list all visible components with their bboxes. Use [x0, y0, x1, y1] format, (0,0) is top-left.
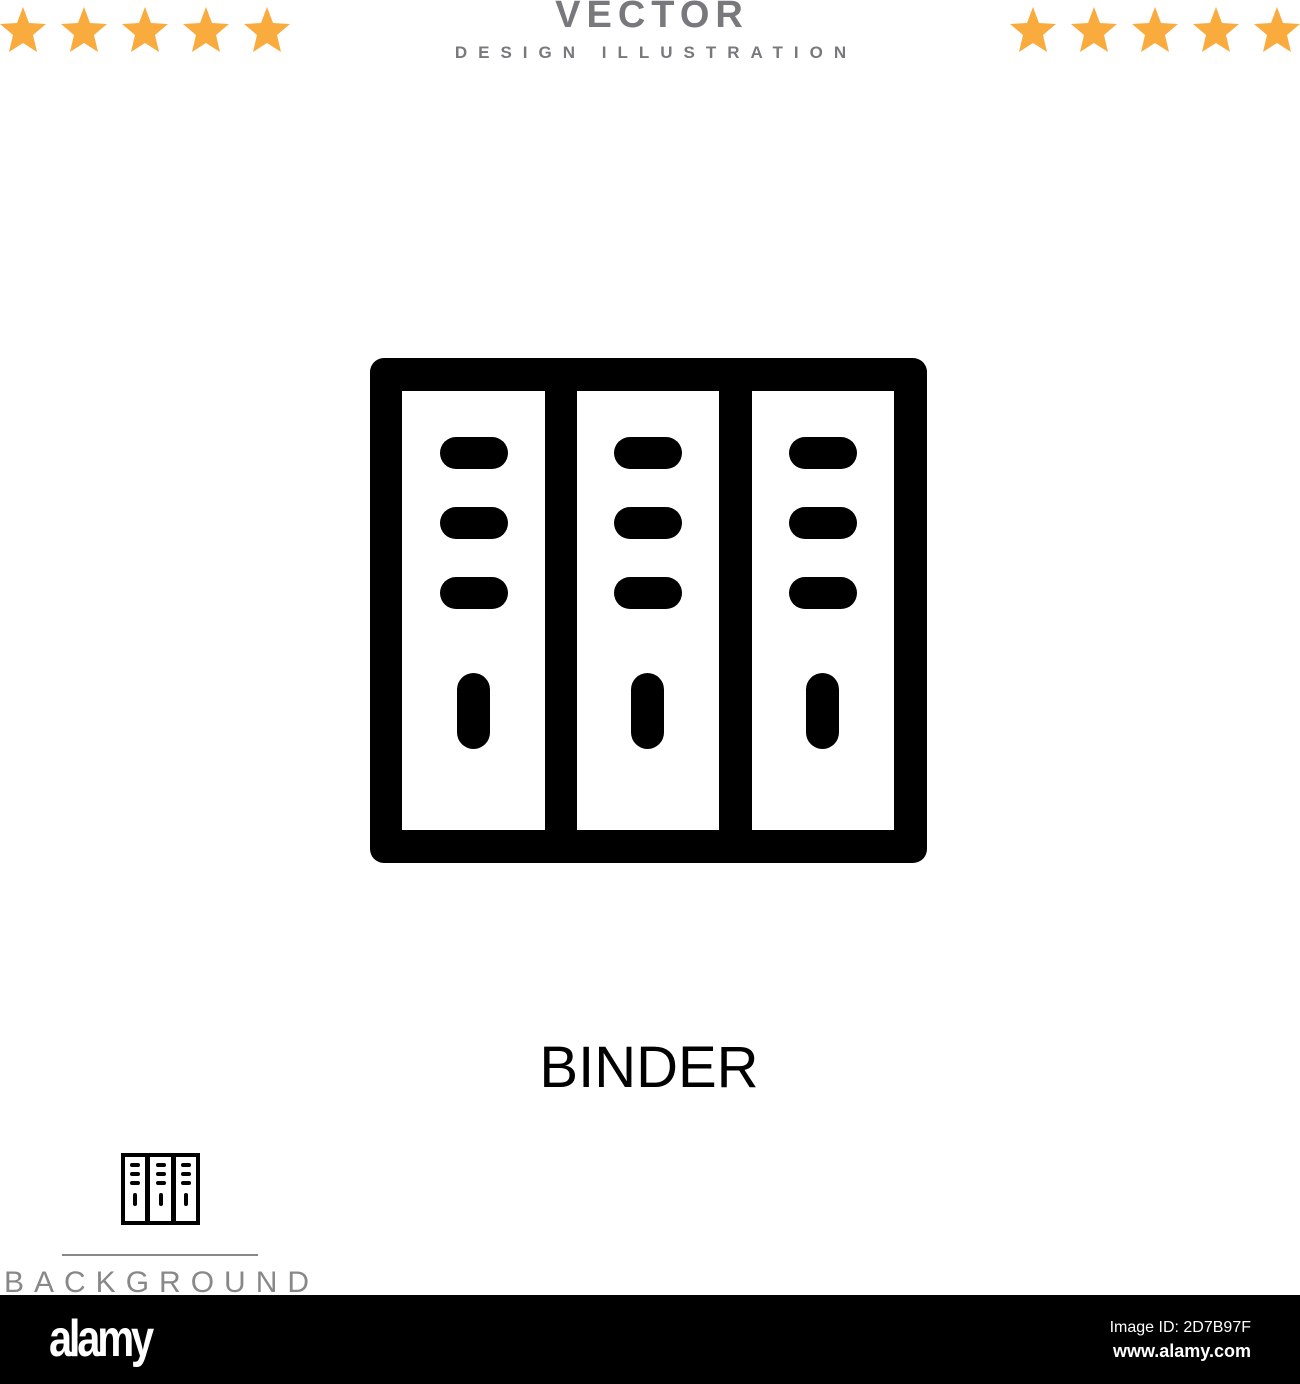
- subtitle: DESIGN ILLUSTRATION: [455, 43, 857, 62]
- background label: BACKGROUND: [4, 1266, 319, 1299]
- main icon: binder: [370, 358, 927, 863]
- footer bar: [0, 1295, 1300, 1384]
- alamy logo: alamy: [49, 1310, 151, 1368]
- image id: Image ID: 2D7B97F: [1110, 1319, 1251, 1336]
- label: BINDER: [539, 1035, 759, 1100]
- small icon: [121, 1153, 200, 1225]
- stars left: [0, 7, 290, 52]
- url: www.alamy.com: [1113, 1341, 1251, 1361]
- stars right: [1010, 7, 1300, 52]
- divider line: [62, 1254, 258, 1256]
